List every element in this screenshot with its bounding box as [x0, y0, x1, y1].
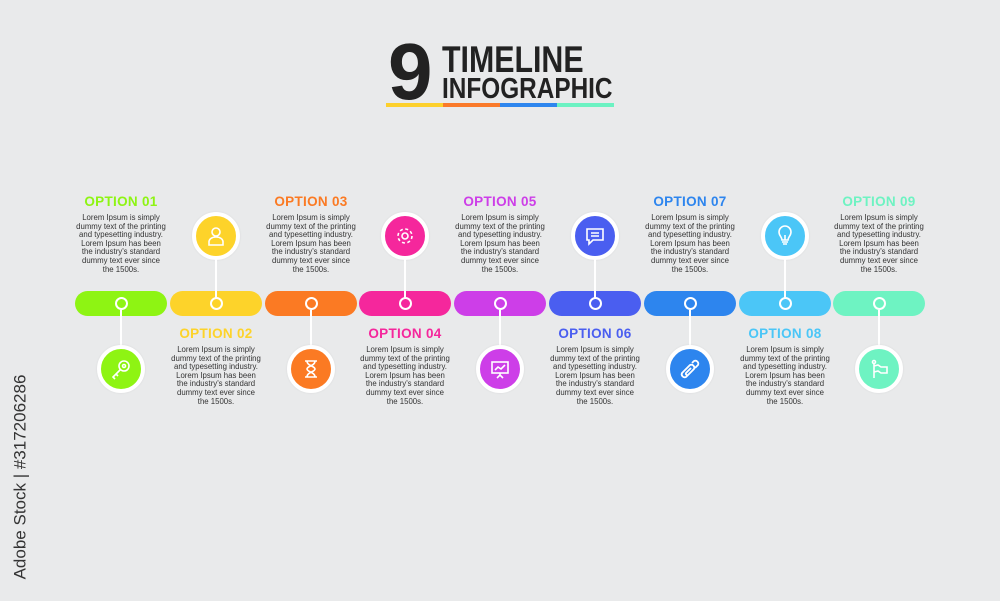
text: Lorem Ipsum has been — [365, 371, 445, 380]
text: dummy text of the printing — [550, 354, 640, 363]
text: Lorem Ipsum is simply — [366, 345, 444, 354]
icon: person — [192, 212, 240, 260]
option 02 — [171, 212, 261, 406]
text: Lorem Ipsum is simply — [556, 345, 634, 354]
title: OPTION 01 — [84, 194, 158, 209]
text: Lorem Ipsum is simply — [746, 345, 824, 354]
text: Lorem Ipsum is simply — [840, 213, 918, 222]
title: OPTION 06 — [558, 326, 632, 341]
number 9: 9 — [388, 27, 432, 116]
text — [76, 213, 166, 274]
option 04 — [360, 212, 450, 406]
text: and typesetting industry. — [648, 230, 732, 239]
icon: flag — [855, 345, 903, 393]
text: and typesetting industry. — [837, 230, 921, 239]
text: dummy text ever since — [366, 388, 444, 397]
text: Lorem Ipsum is simply — [651, 213, 729, 222]
text: Lorem Ipsum is simply — [82, 213, 160, 222]
text: the industry's standard — [366, 379, 444, 388]
title: INFOGRAPHIC — [442, 73, 613, 105]
text: dummy text ever since — [651, 256, 729, 265]
text: dummy text ever since — [556, 388, 634, 397]
option 03 — [266, 194, 356, 393]
text: dummy text of the printing — [76, 222, 166, 231]
text: dummy text of the printing — [171, 354, 261, 363]
icon: key — [97, 345, 145, 393]
option 09 — [834, 194, 924, 393]
text: the 1500s. — [293, 265, 329, 274]
icon: gear — [381, 212, 429, 260]
text: Lorem Ipsum is simply — [272, 213, 350, 222]
text: dummy text ever since — [177, 388, 255, 397]
icon: chat — [571, 212, 619, 260]
text: the 1500s. — [861, 265, 897, 274]
text: dummy text ever since — [746, 388, 824, 397]
text: Lorem Ipsum has been — [745, 371, 825, 380]
text: dummy text ever since — [840, 256, 918, 265]
text — [834, 213, 924, 274]
text: Lorem Ipsum has been — [271, 239, 351, 248]
text: the industry's standard — [272, 247, 350, 256]
title: OPTION 09 — [842, 194, 916, 209]
option 01 — [76, 194, 166, 393]
text: the 1500s. — [198, 397, 234, 406]
text: dummy text ever since — [272, 256, 350, 265]
text: dummy text of the printing — [266, 222, 356, 231]
icon: light bulb — [761, 212, 809, 260]
text: Lorem Ipsum has been — [555, 371, 635, 380]
title: OPTION 08 — [748, 326, 822, 341]
text: and typesetting industry. — [553, 362, 637, 371]
text: the 1500s. — [387, 397, 423, 406]
text: Lorem Ipsum has been — [176, 371, 256, 380]
title: OPTION 05 — [463, 194, 537, 209]
text: the industry's standard — [177, 379, 255, 388]
icon: hourglass — [287, 345, 335, 393]
title: OPTION 02 — [179, 326, 253, 341]
text: and typesetting industry. — [458, 230, 542, 239]
text: the industry's standard — [556, 379, 634, 388]
text — [740, 345, 830, 406]
text: and typesetting industry. — [743, 362, 827, 371]
text: dummy text of the printing — [740, 354, 830, 363]
text: the 1500s. — [767, 397, 803, 406]
text: Lorem Ipsum is simply — [177, 345, 255, 354]
text: the industry's standard — [461, 247, 539, 256]
option 08 — [740, 212, 830, 406]
option 05 — [455, 194, 545, 393]
text — [360, 345, 450, 406]
text: and typesetting industry. — [174, 362, 258, 371]
text: the 1500s. — [103, 265, 139, 274]
text: and typesetting industry. — [363, 362, 447, 371]
option 06 — [550, 212, 640, 406]
option 07 — [645, 194, 735, 393]
text: dummy text of the printing — [360, 354, 450, 363]
text: the industry's standard — [82, 247, 160, 256]
text: dummy text ever since — [461, 256, 539, 265]
text: dummy text of the printing — [645, 222, 735, 231]
text — [645, 213, 735, 274]
text: dummy text of the printing — [834, 222, 924, 231]
text — [266, 213, 356, 274]
heading text: TIMELINE — [442, 39, 584, 80]
title: OPTION 04 — [368, 326, 442, 341]
text: Lorem Ipsum is simply — [461, 213, 539, 222]
text: dummy text ever since — [82, 256, 160, 265]
text: and typesetting industry. — [269, 230, 353, 239]
title: OPTION 03 — [274, 194, 348, 209]
text: the 1500s. — [672, 265, 708, 274]
text: Lorem Ipsum has been — [839, 239, 919, 248]
text: the 1500s. — [482, 265, 518, 274]
text — [171, 345, 261, 406]
text: dummy text of the printing — [455, 222, 545, 231]
text: Lorem Ipsum has been — [460, 239, 540, 248]
text: the 1500s. — [577, 397, 613, 406]
text — [455, 213, 545, 274]
text — [550, 345, 640, 406]
text: the industry's standard — [746, 379, 824, 388]
text: and typesetting industry. — [79, 230, 163, 239]
title — [386, 27, 614, 116]
text: the industry's standard — [840, 247, 918, 256]
text: Lorem Ipsum has been — [81, 239, 161, 248]
text: the industry's standard — [651, 247, 729, 256]
title: OPTION 07 — [653, 194, 727, 209]
watermark side text: Adobe Stock | #317206286 — [10, 375, 30, 579]
text: Lorem Ipsum has been — [650, 239, 730, 248]
colored underline — [386, 103, 614, 107]
icon: presentation — [476, 345, 524, 393]
icon: link — [666, 345, 714, 393]
